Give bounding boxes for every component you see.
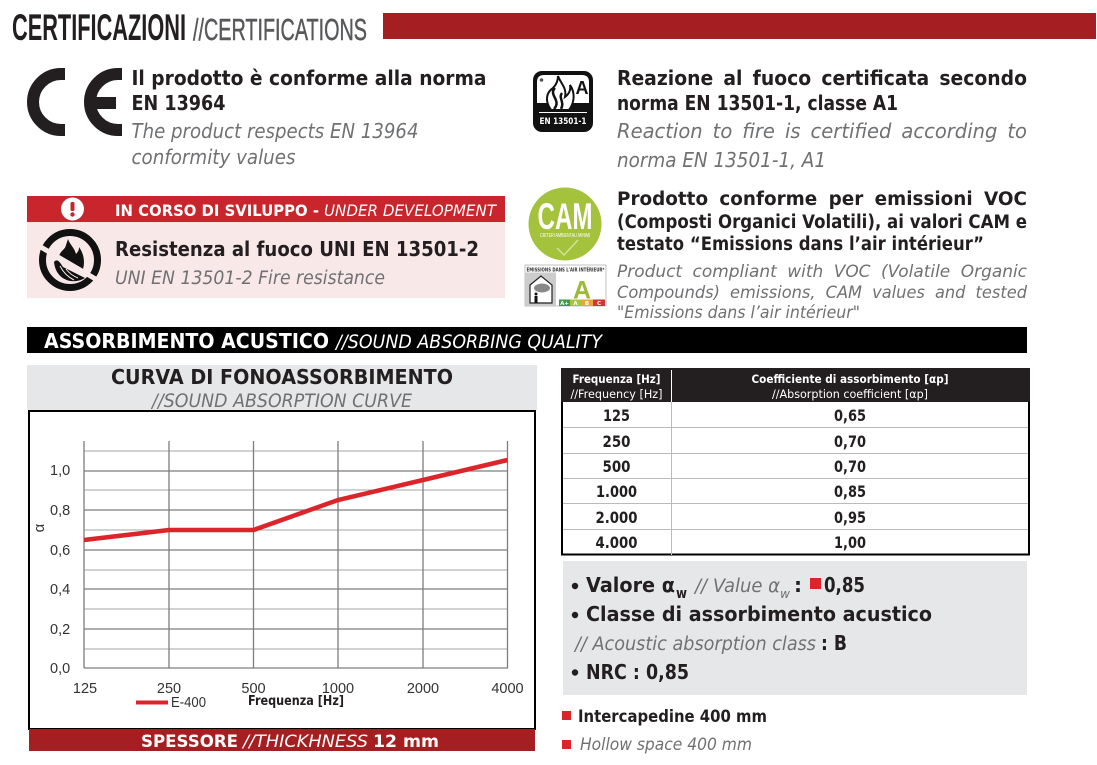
- x axis labels: 500: [241, 681, 266, 697]
- thickness bar: 12 mm: [373, 732, 439, 752]
- icon: no fire: [39, 232, 99, 288]
- icon: CAM badge: CAM: [538, 196, 592, 237]
- icon: emissions label: B: [585, 301, 589, 307]
- icon: warning exclamation: [61, 198, 84, 220]
- table frequency column: 125: [603, 406, 630, 425]
- text block: CE conformity: The product respects EN 13964: [132, 119, 418, 143]
- table coefficient column: 0,70: [834, 432, 866, 451]
- table header: [570, 372, 948, 401]
- table: absorption coefficients: [561, 368, 1030, 555]
- icon: emissions label: ÉMISSIONS DANS L'AIR INTÉRIEUR*: [526, 266, 605, 274]
- text block: fire reaction: Reaction to fire is certified according to: [617, 119, 1027, 143]
- table coefficient column: 0,65: [834, 406, 866, 425]
- fire resistance text: UNI EN 13501-2 Fire resistance: [115, 268, 385, 289]
- banner text: UNDER DEVELOPMENT: [324, 201, 497, 220]
- table header: //Frequency [Hz]: [570, 387, 662, 401]
- text block: fire reaction: norma EN 13501-1, classe A1: [617, 91, 898, 115]
- title: CERTIFICAZIONI: [12, 7, 186, 48]
- text block: VOC emissions: [617, 189, 1028, 322]
- table frequency column: 250: [602, 432, 630, 451]
- x axis labels: 1000: [322, 681, 354, 697]
- table coefficient column: [834, 406, 866, 552]
- y axis title: α: [31, 523, 48, 532]
- acoustic class: [572, 602, 932, 655]
- y axis labels: 0,8: [50, 503, 70, 519]
- x axis labels: 125: [73, 681, 97, 697]
- table coefficient column: 0,70: [834, 457, 866, 476]
- text block: VOC emissions: (Composti Organici Volatili), ai valori CAM e: [617, 212, 1027, 233]
- table coefficient column: 1,00: [834, 533, 866, 552]
- panel: acoustic values: [563, 561, 1027, 695]
- table coefficient column: 0,95: [834, 508, 866, 527]
- text block: VOC emissions: Product compliant with VOC (Volatile Organic: [617, 262, 1027, 281]
- title red bar: [383, 13, 1096, 39]
- table header: Coefficiente di assorbimento [αp]: [752, 372, 948, 386]
- fire resistance text: [115, 237, 479, 289]
- table frequency column: [596, 406, 638, 552]
- hollow space note: [562, 707, 767, 755]
- value alpha-w: [572, 573, 865, 602]
- icon: emissions label: C: [597, 301, 601, 307]
- icon: emissions label: A: [573, 301, 578, 307]
- section heading: sound absorbing quality: //SOUND ABSORBING QUALITY: [334, 331, 603, 353]
- text block: VOC emissions: Compounds) emissions, CAM values and tested: [617, 283, 1028, 302]
- thickness bar: [29, 729, 535, 752]
- text block: CE conformity: [132, 66, 486, 169]
- y axis labels: 0,4: [50, 582, 70, 598]
- x axis labels: 4000: [491, 681, 524, 697]
- table frequency column: 500: [602, 457, 630, 476]
- acoustic class: : B: [821, 631, 847, 655]
- thickness bar: SPESSORE: [141, 732, 238, 752]
- icon: fire reaction A1: [533, 71, 593, 132]
- text block: VOC emissions: "Emissions dans l’air intérieur": [617, 303, 860, 322]
- x axis labels: [73, 681, 524, 697]
- thickness bar: //THICKHNESS: [241, 732, 368, 752]
- icon: CAM badge: CRITERI AMBIENTALI MINIMI: [540, 233, 590, 239]
- y axis labels: [50, 463, 70, 677]
- title: //CERTIFICATIONS: [193, 12, 367, 47]
- data line E-400: [84, 460, 508, 540]
- icon: emissions label: A+: [560, 301, 569, 307]
- acoustic class: // Acoustic absorption class: [573, 634, 816, 655]
- table frequency column: 2.000: [596, 508, 638, 527]
- icon: CE mark: [33, 74, 122, 130]
- x axis labels: 250: [157, 681, 181, 697]
- NRC: NRC : 0,85: [586, 660, 689, 684]
- banner text: [115, 201, 497, 220]
- table header: //Absorption coefficient [αp]: [772, 387, 928, 401]
- y axis labels: 0,0: [50, 661, 70, 677]
- chart heading: //SOUND ABSORPTION CURVE: [150, 391, 412, 412]
- icon: CAM badge: [528, 188, 602, 260]
- value alpha-w: :: [794, 573, 802, 597]
- fire resistance text: Resistenza al fuoco UNI EN 13501-2: [115, 237, 479, 261]
- text block: VOC emissions: testato “Emissions dans l’air intérieur”: [617, 234, 984, 255]
- grid: [84, 441, 508, 668]
- table frequency column: 4.000: [596, 533, 638, 552]
- x axis labels: 2000: [407, 681, 439, 697]
- chart heading: [27, 365, 537, 412]
- x axis title: Frequenza [Hz]: [248, 694, 344, 709]
- y axis labels: 0,6: [50, 543, 70, 559]
- text block: CE conformity: conformity values: [132, 145, 296, 169]
- table header: Frequenza [Hz]: [572, 372, 660, 386]
- chart heading: CURVA DI FONOASSORBIMENTO: [111, 365, 453, 389]
- text block: fire reaction: Reazione al fuoco certificata secondo: [617, 66, 1027, 90]
- table coefficient column: 0,85: [834, 482, 866, 501]
- value alpha-w: w: [676, 586, 687, 602]
- section heading: sound absorbing quality: ASSORBIMENTO ACUSTICO: [44, 329, 329, 353]
- y axis labels: 0,2: [50, 622, 70, 638]
- value alpha-w: // Value α: [693, 576, 780, 597]
- legend: [136, 695, 206, 711]
- hollow space note: Intercapedine 400 mm: [578, 707, 767, 727]
- value alpha-w: Valore α: [586, 573, 675, 597]
- text block: fire reaction: norma EN 13501-1, A1: [617, 148, 826, 172]
- section heading: sound absorbing quality: [27, 327, 1027, 353]
- text block: VOC emissions: Prodotto conforme per emissioni VOC: [617, 189, 1027, 210]
- hollow space note: Hollow space 400 mm: [580, 735, 752, 755]
- icon: emissions label: [525, 265, 606, 307]
- text block: CE conformity: EN 13964: [132, 91, 226, 115]
- icon: emissions label: A: [573, 276, 591, 304]
- legend: E-400: [171, 695, 206, 711]
- line chart: sound absorption: [29, 411, 535, 729]
- table frequency column: 1.000: [596, 482, 637, 501]
- text block: CE conformity: Il prodotto è conforme alla norma: [132, 66, 486, 90]
- acoustic class: Classe di assorbimento acustico: [586, 602, 932, 626]
- y axis labels: 1,0: [50, 463, 70, 479]
- icon: fire reaction A1: A: [576, 78, 588, 98]
- panel: under development: [27, 196, 505, 298]
- value alpha-w: 0,85: [824, 573, 865, 597]
- banner text: IN CORSO DI SVILUPPO -: [115, 201, 319, 220]
- text block: fire reaction: [617, 66, 1027, 172]
- icon: fire reaction A1: EN 13501-1: [540, 117, 587, 127]
- value alpha-w: w: [780, 586, 791, 601]
